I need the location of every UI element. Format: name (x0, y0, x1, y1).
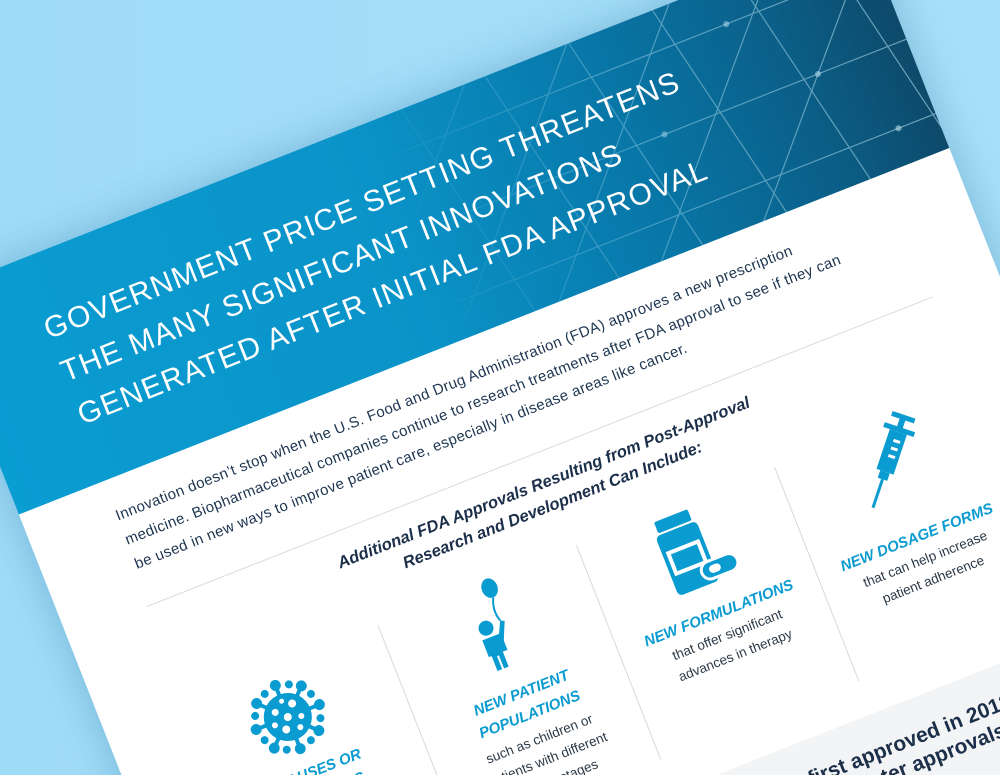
icon: child with balloon (478, 578, 509, 671)
heading: new formulations: NEW FORMULATIONS (642, 576, 796, 650)
subheading: Additional FDA Approvals Resulting from Post-Approval (335, 394, 753, 572)
column 1: new uses (250, 680, 367, 775)
description: that offer significant (670, 606, 784, 663)
column 3: new formulations (642, 510, 796, 684)
column 2: new patient populations (471, 578, 609, 775)
icon: pill bottle (654, 510, 736, 595)
description: advances in therapy (676, 626, 794, 684)
title: GENERATED AFTER INITIAL FDA APPROVAL (73, 154, 713, 431)
intro paragraph: Innovation doesn’t stop when the U.S. Food and Drug Administration (FDA) approves a new prescription (113, 242, 795, 524)
intro paragraph: be used in new ways to improve patient care, especially in disease areas like cancer. (132, 340, 690, 573)
header band (0, 0, 949, 515)
description: that can help increase (861, 528, 989, 590)
icon: syringe (872, 411, 916, 508)
heading: new patient populations: NEW PATIENT (471, 667, 571, 720)
title: THE MANY SIGNIFICANT INNOVATIONS (56, 138, 628, 389)
description: such as children or (484, 711, 595, 767)
subheading: Research and Development Can Include: (400, 438, 705, 572)
callout panel: 2012 approvals (201, 611, 1000, 775)
heading: new patient populations (471, 667, 583, 742)
icon: virus (250, 680, 325, 754)
heading: new dosage forms: NEW DOSAGE FORMS (838, 500, 995, 575)
description: patient adherence (880, 553, 986, 606)
header lattice pattern (400, 0, 942, 319)
heading: new patient populations: POPULATIONS (477, 687, 583, 742)
column 4: new dosage forms (838, 411, 995, 606)
intro paragraph: medicine. Biopharmaceutical companies continue to research treatments after FDA approval to see if they can (123, 251, 843, 549)
title: GOVERNMENT PRICE SETTING THREATENS (39, 66, 685, 346)
